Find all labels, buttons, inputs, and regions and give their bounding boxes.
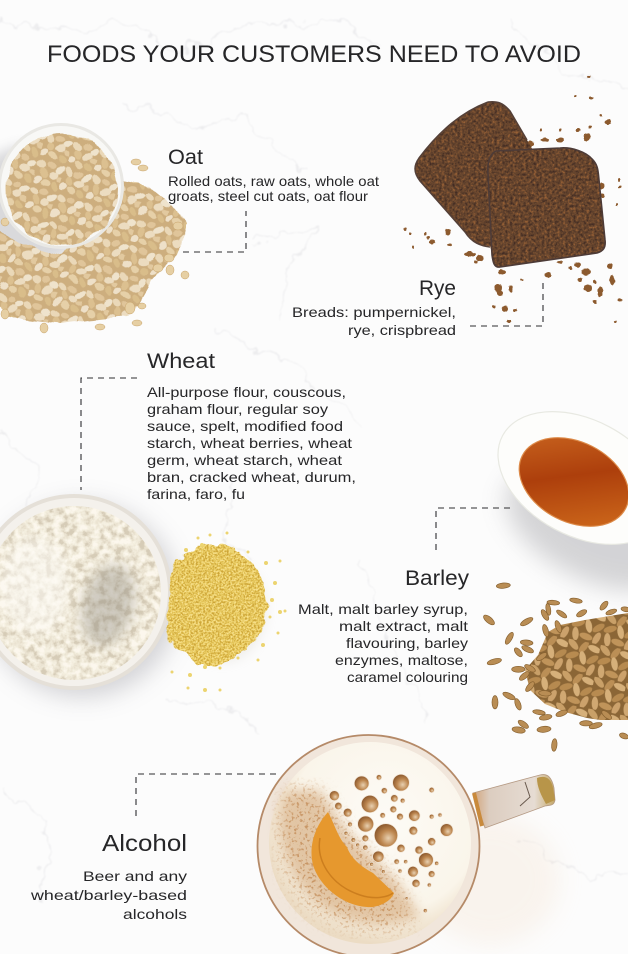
alcohol label: wheat/barley-based [30, 887, 187, 903]
rye label: rye, crispbread [348, 322, 456, 338]
barley label: enzymes, maltose, [335, 652, 468, 668]
alcohol label: alcohols [123, 906, 187, 922]
barley label: Barley [405, 567, 470, 590]
wheat label: bran, cracked wheat, durum, [147, 469, 356, 485]
barley label: malt extract, malt [339, 618, 468, 634]
wheat label: graham flour, regular soy [147, 401, 328, 417]
alcohol label [30, 830, 187, 922]
alcohol label: Beer and any [83, 868, 187, 884]
barley label: Malt, malt barley syrup, [298, 601, 468, 617]
wheat label: farina, faro, fu [147, 486, 245, 502]
image: mug of beer from above [258, 735, 560, 954]
connector: oat [183, 211, 246, 252]
connector: alcohol [136, 774, 276, 820]
connector: wheat [81, 378, 137, 490]
image: bowl of flour and couscous [0, 494, 286, 697]
alcohol label: Alcohol [102, 830, 187, 856]
oat label [168, 146, 379, 204]
image: dish of malt syrup [475, 385, 628, 616]
wheat label: sauce, spelt, modified food [147, 418, 343, 434]
wheat label: starch, wheat berries, wheat [147, 435, 352, 451]
image: rye bread slices and crumbs [404, 76, 623, 323]
barley label: caramel colouring [347, 669, 468, 685]
rye label [292, 277, 456, 338]
image: bowl and pile of rolled oats [0, 123, 189, 333]
barley label [298, 567, 470, 685]
title: FOODS YOUR CUSTOMERS NEED TO AVOID [47, 41, 581, 68]
connector: rye [470, 278, 543, 326]
rye label: Rye [419, 277, 456, 300]
rye label: Breads: pumpernickel, [292, 304, 456, 320]
wheat label: germ, wheat starch, wheat [147, 452, 342, 468]
wheat label: All-purpose flour, couscous, [147, 384, 346, 400]
barley label: flavouring, barley [346, 635, 468, 651]
connector: barley [436, 508, 510, 555]
oat label: Oat [168, 146, 203, 169]
wheat label [147, 350, 356, 502]
oat label: groats, steel cut oats, oat flour [168, 188, 368, 204]
wheat label: Wheat [147, 350, 215, 373]
oat label: Rolled oats, raw oats, whole oat [168, 173, 379, 189]
image: pile of barley grains [482, 582, 628, 752]
